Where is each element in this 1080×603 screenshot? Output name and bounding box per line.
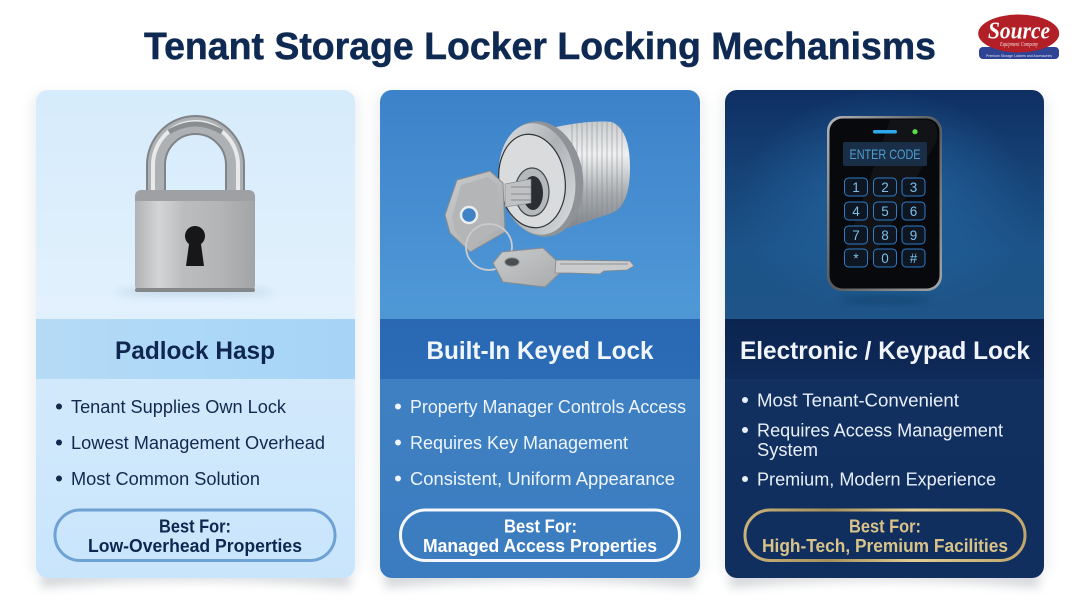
- header band: [380, 319, 700, 379]
- icon: keypad: 3: [910, 180, 917, 195]
- icon: keypad: 2: [881, 180, 889, 195]
- bullet list: [395, 397, 686, 489]
- bullet list: Requires Key Management: [410, 433, 628, 453]
- bullet list: Property Manager Controls Access: [410, 397, 686, 417]
- logo: Source Equipment Company: [978, 14, 1059, 59]
- bullet list: [56, 397, 325, 489]
- panel: electronic keypad lock: [719, 90, 1050, 588]
- bullet list: Consistent, Uniform Appearance: [410, 469, 675, 489]
- bullet list: Premium, Modern Experience: [757, 470, 996, 490]
- callout: best for: Managed Access Properties: [423, 536, 657, 556]
- icon: keypad: 5: [881, 204, 889, 219]
- icon: keypad: 6: [910, 204, 917, 219]
- icon: keypad: [827, 116, 942, 303]
- logo: Source Equipment Company: Premium Storage Lockers and Accessories: [986, 54, 1052, 58]
- icon: keypad: *: [853, 251, 859, 266]
- callout: best for: [745, 510, 1025, 560]
- title: Tenant Storage Locker Locking Mechanisms: [144, 26, 936, 68]
- callout: best for: Best For:: [159, 516, 231, 536]
- bullet list: Tenant Supplies Own Lock: [71, 397, 287, 417]
- header band: [36, 319, 355, 379]
- heading: Built-In Keyed Lock: [426, 337, 654, 365]
- logo: Source Equipment Company: Equipment Company: [999, 42, 1038, 48]
- callout: best for: Low-Overhead Properties: [88, 536, 302, 556]
- icon: keypad: 4: [852, 204, 860, 219]
- bullet list: Most Tenant-Convenient: [757, 390, 959, 410]
- icon: keypad: 9: [910, 228, 917, 243]
- icon: keypad: #: [910, 251, 918, 266]
- bullet list: [742, 390, 1003, 490]
- bullet list: Most Common Solution: [71, 469, 260, 489]
- icon: keypad: 8: [881, 228, 889, 243]
- logo: Source Equipment Company: Source: [988, 18, 1050, 44]
- icon: keypad: ENTER CODE: [850, 146, 920, 162]
- icon: cylinder lock and keys: [445, 116, 634, 287]
- header band: [725, 319, 1044, 379]
- bullet list: Requires Access Management: [757, 420, 1003, 440]
- bullet list: Lowest Management Overhead: [71, 433, 325, 453]
- callout: best for: [55, 510, 335, 560]
- icon: keypad: 1: [852, 180, 860, 195]
- panel: padlock hasp: [30, 90, 361, 588]
- heading: Electronic / Keypad Lock: [740, 337, 1030, 365]
- icon: keypad: 0: [881, 251, 889, 266]
- bullet list: System: [757, 440, 818, 460]
- panel: built-in keyed lock: [374, 90, 706, 588]
- callout: best for: Best For:: [849, 516, 921, 536]
- icon: padlock: [115, 122, 275, 296]
- callout: best for: Best For:: [504, 516, 577, 536]
- icon: keypad: 7: [852, 228, 860, 243]
- callout: best for: High-Tech, Premium Facilities: [762, 536, 1008, 556]
- callout: best for: [400, 510, 680, 560]
- heading: Padlock Hasp: [115, 337, 275, 365]
